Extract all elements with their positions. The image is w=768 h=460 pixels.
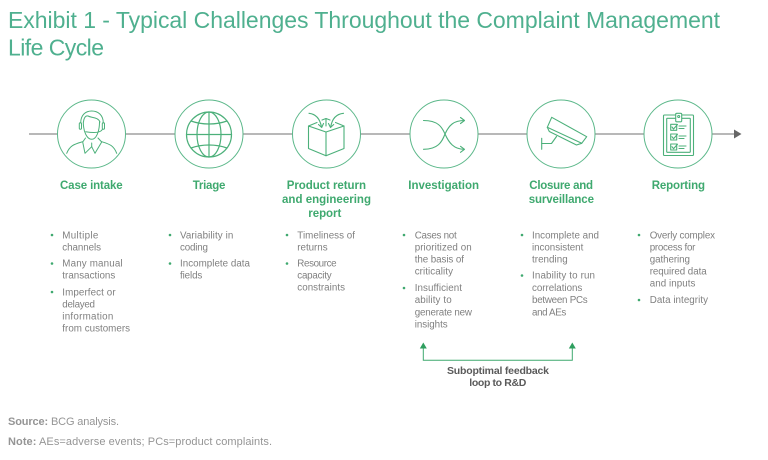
heading: Investigation [408, 180, 479, 192]
icon: surveillance camera [527, 100, 595, 168]
bullet list: capacity [297, 270, 332, 282]
feedback loop label: Suboptimal feedback [447, 365, 549, 377]
bullet list [403, 230, 473, 330]
bullet list: Many manual [62, 258, 123, 270]
bullet list: Timeliness of [297, 230, 355, 242]
bullet list: channels [62, 242, 101, 254]
bullet list: Incomplete and [532, 230, 599, 242]
bullet list: between PCs [532, 295, 588, 306]
bullet list: criticality [415, 266, 453, 278]
bullet list: constraints [297, 282, 345, 294]
feedback loop label: loop to R&D [469, 377, 527, 389]
feedback loop arrow [420, 342, 576, 360]
bullet list: inconsistent [532, 242, 584, 254]
heading: Closure and [529, 180, 593, 192]
icon: globe [175, 100, 243, 168]
bullet list: insights [415, 320, 448, 330]
bullet list: from customers [62, 324, 130, 334]
bullet list: information [62, 312, 113, 322]
bullet list: Inability to run [532, 270, 595, 282]
abbreviations note: Note: AEs=adverse events; PCs=product complaints. [8, 436, 272, 448]
timeline arrow [29, 130, 742, 138]
heading: Reporting [652, 180, 705, 192]
heading: Product return [287, 180, 366, 192]
bullet list [521, 230, 599, 318]
bullet list [286, 230, 355, 294]
heading [529, 180, 594, 206]
icon: headset agent [58, 100, 126, 168]
bullet list: Imperfect or [62, 288, 116, 298]
step: case intake [51, 100, 130, 334]
bullet list [51, 230, 130, 334]
bullet list: Multiple [62, 230, 99, 242]
bullet list: generate new [415, 307, 473, 318]
bullet list: gathering [650, 254, 690, 266]
bullet list: Resource [297, 258, 337, 270]
source note: Source: BCG analysis. [8, 416, 119, 428]
bullet list: coding [180, 242, 208, 254]
bullet list: required data [650, 266, 707, 278]
feedback loop label [447, 365, 549, 389]
bullet list: correlations [532, 283, 582, 294]
step: triage [169, 100, 251, 282]
bullet list: returns [297, 242, 328, 254]
bullet list: Incomplete data [180, 258, 251, 270]
bullet list: Cases not [415, 230, 457, 242]
bullet list: and inputs [650, 278, 695, 290]
bullet list: process for [650, 242, 696, 254]
bullet list: transactions [62, 270, 115, 282]
bullet list: delayed [62, 300, 95, 310]
title: Life Cycle [8, 34, 104, 60]
title: Exhibit 1 - Typical Challenges Throughout the Complaint Management [8, 7, 721, 33]
heading: and engineering [282, 194, 371, 206]
step: closure and surveillance [521, 100, 599, 318]
bullet list: the basis of [415, 254, 464, 266]
bullet list [169, 230, 251, 282]
bullet list [638, 230, 715, 306]
bullet list: Insufficient [415, 283, 462, 294]
heading: report [308, 208, 341, 220]
heading: Triage [193, 180, 225, 192]
heading: Case intake [60, 180, 123, 192]
step: reporting [638, 100, 715, 306]
bullet list: Data integrity [650, 295, 708, 306]
icon: box with arrows [292, 100, 360, 168]
bullet list: Variability in [180, 230, 233, 242]
heading: surveillance [529, 194, 594, 206]
heading [282, 180, 371, 220]
bullet list: trending [532, 254, 568, 266]
step: product return [282, 100, 371, 294]
icon: clipboard checklist [644, 100, 712, 168]
bullet list: fields [180, 270, 202, 282]
bullet list: Overly complex [650, 230, 715, 242]
bullet list: prioritized on [415, 242, 472, 254]
bullet list: and AEs [532, 307, 566, 318]
bullet list: ability to [415, 295, 452, 306]
step: investigation [403, 100, 479, 330]
title [8, 7, 721, 60]
icon: crossing arrows [410, 100, 478, 168]
